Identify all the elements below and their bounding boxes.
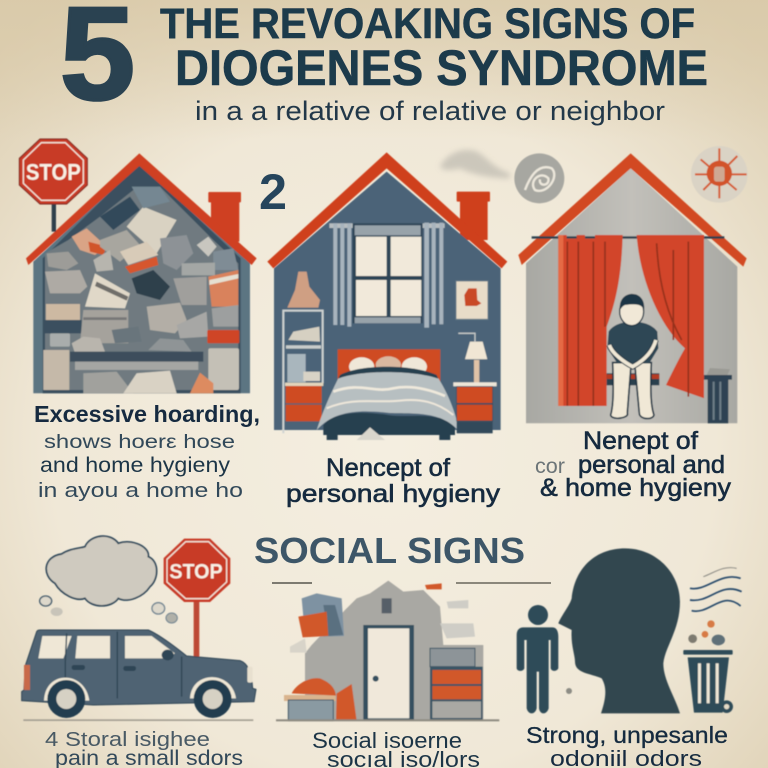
- number 2: 2: [259, 164, 287, 220]
- small dot: [566, 688, 572, 694]
- caption: neglect of hygiene centre: Nencept of: [326, 454, 450, 482]
- standing figure: [517, 605, 558, 713]
- title line 2: DIOGENES SYNDROME: [175, 40, 708, 96]
- door: [363, 625, 414, 720]
- bags on shelf: [290, 583, 475, 653]
- car body: [22, 630, 256, 705]
- caption: excessive hoarding: and home hygieny: [40, 454, 231, 477]
- subtitle: in a a relative of relative or neighbor: [195, 96, 665, 126]
- house wall: [526, 168, 737, 423]
- title block: [60, 0, 708, 127]
- nightstand and lamp: [453, 333, 497, 433]
- seated person: [607, 294, 659, 419]
- head silhouette: [558, 548, 680, 713]
- caption: neglect of hygiene right: Nenept of: [583, 427, 698, 455]
- panel: strong odors: [517, 548, 742, 713]
- chimney: [457, 192, 490, 240]
- odor wave lines: [690, 568, 742, 611]
- caption: excessive hoarding: in ayou a home ho: [38, 480, 243, 502]
- bed with blanket: [317, 367, 459, 440]
- chimney: [208, 192, 241, 242]
- caption: neglect of hygiene right: & home hygieny: [540, 474, 732, 502]
- bookshelf: [283, 272, 323, 433]
- caption: excessive hoarding: [34, 401, 260, 502]
- headboard: [338, 349, 440, 383]
- pillows: [349, 356, 427, 376]
- caption: neglect of hygiene right: personal and: [578, 451, 725, 479]
- caption: social isolation: [312, 728, 480, 768]
- heading: social signs: SOCIAL SIGNS: [254, 530, 525, 571]
- right curtain: [637, 235, 704, 398]
- roof: [518, 153, 747, 267]
- caption: neglect of hygiene right: [535, 427, 732, 502]
- window: [353, 223, 423, 323]
- grey wall: [305, 581, 483, 720]
- caption: strong odors: [526, 722, 728, 768]
- trash bin: [704, 368, 732, 423]
- house wall: [274, 172, 501, 430]
- caption: neglect of hygiene centre: personal hygieny: [286, 480, 501, 508]
- left curtain: [329, 223, 353, 327]
- slippers: [357, 427, 385, 440]
- panel: withdrawn person house: [514, 146, 748, 423]
- panel: hoarding house: [19, 139, 257, 393]
- wall picture: [456, 281, 488, 319]
- caption: excessive hoarding: shows hoerε hose: [44, 432, 235, 453]
- caption: neglect of hygiene right: cor: [535, 455, 565, 478]
- panel: car: [22, 536, 256, 721]
- caption: car: 4 Storal isighee: [45, 729, 210, 751]
- car wheels: [44, 677, 236, 718]
- bench with clothes: [284, 678, 357, 721]
- stop sign: STOP: [26, 159, 81, 185]
- caption: social isolation: Social isoerne: [312, 728, 462, 753]
- house walls and clutter: [33, 163, 250, 393]
- panel: bedroom house: [267, 150, 510, 440]
- curtain rod: [532, 236, 724, 239]
- title line 1: THE REVOAKING SIGNS OF: [160, 0, 695, 48]
- stop sign: [19, 139, 87, 232]
- icon: grey tangle badge: [514, 153, 564, 203]
- stop sign: STOP: [169, 559, 223, 583]
- smoke cloud: [440, 150, 510, 178]
- caption: excessive hoarding: Excessive hoarding,: [34, 401, 260, 427]
- thought cloud: [40, 536, 177, 623]
- panel: closed door and clutter: [276, 581, 499, 721]
- icon: orange germ badge: [691, 146, 748, 203]
- ground line: [23, 719, 253, 721]
- caption: car: [45, 729, 243, 768]
- roof: [26, 153, 257, 265]
- caption: neglect of hygiene centre: [286, 454, 501, 508]
- dresser: [430, 648, 483, 720]
- caption: strong odors: Strong, unpesanle: [526, 722, 728, 748]
- left curtain: [558, 235, 623, 406]
- floor line: [276, 719, 499, 721]
- roof: [267, 152, 507, 268]
- trash can with debris: [683, 620, 733, 713]
- stop sign: [164, 539, 230, 657]
- right curtain: [423, 223, 445, 328]
